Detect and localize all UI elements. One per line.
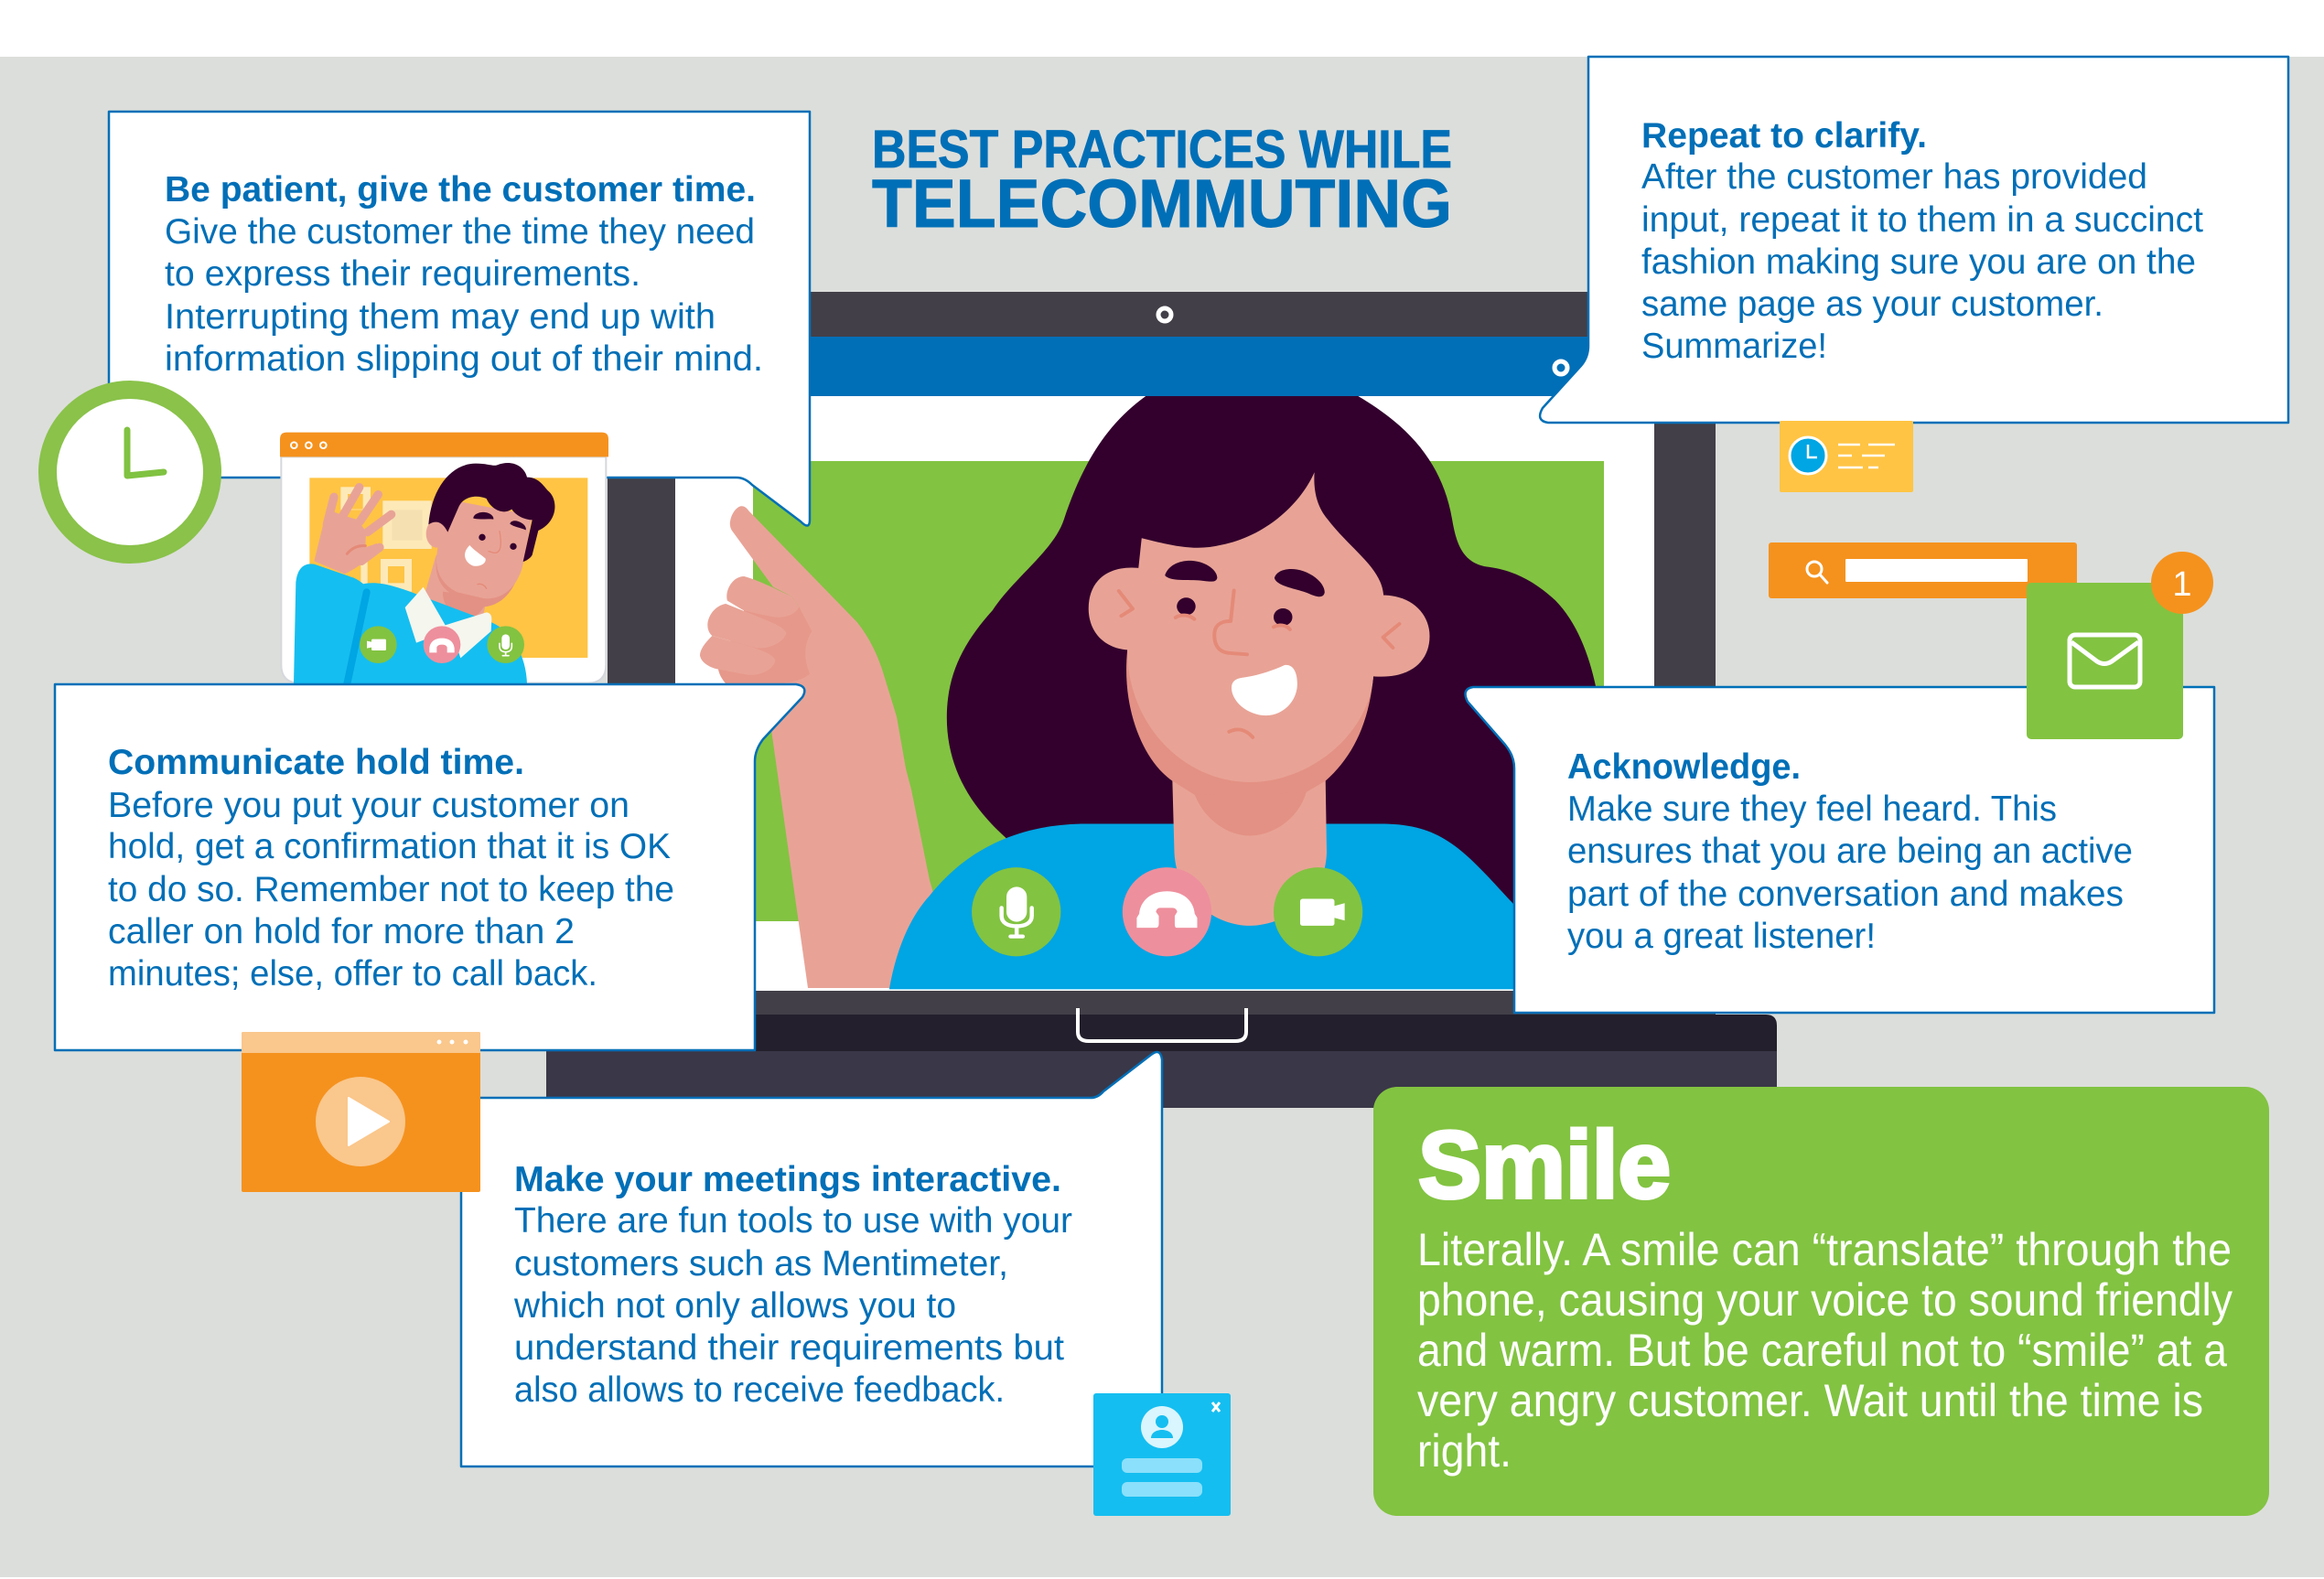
text block: communicate hold time: minutes; else, offer to call back. bbox=[108, 954, 597, 994]
icon: hang up button bbox=[1123, 867, 1211, 956]
heading: acknowledge: Acknowledge. bbox=[1567, 747, 1801, 787]
icon: mail card with notification bbox=[2027, 552, 2213, 739]
title bbox=[872, 120, 1452, 242]
icon: video camera button bbox=[1274, 867, 1362, 956]
woman's head and shoulders bbox=[889, 396, 1609, 989]
text block: repeat to clarify: input, repeat it to them in a succinct bbox=[1641, 200, 2203, 240]
text block: communicate hold time: Before you put your customer on bbox=[108, 786, 629, 825]
heading: repeat to clarify: Repeat to clarify. bbox=[1641, 116, 1927, 156]
text block: meetings interactive: which not only allows you to bbox=[513, 1286, 956, 1326]
icon: mail card with notification: 1 bbox=[2172, 565, 2192, 604]
text block: smile: Literally. A smile can “translate” through the bbox=[1417, 1224, 2232, 1275]
text block: smile: very angry customer. Wait until the time is bbox=[1417, 1375, 2203, 1426]
title: BEST PRACTICES WHILE bbox=[872, 120, 1452, 179]
text block: acknowledge: part of the conversation and makes bbox=[1567, 875, 2124, 914]
text block: communicate hold time: caller on hold for more than 2 bbox=[108, 912, 575, 951]
text block: communicate hold time: to do so. Remember not to keep the bbox=[108, 870, 674, 909]
text block: be patient: information slipping out of their mind. bbox=[165, 339, 763, 379]
text block: repeat to clarify bbox=[1641, 157, 2203, 366]
text block: acknowledge: Make sure they feel heard. This bbox=[1567, 790, 2057, 829]
text block: repeat to clarify: Summarize! bbox=[1641, 327, 1827, 366]
icon: small video button bbox=[360, 626, 397, 663]
text block: acknowledge bbox=[1567, 790, 2133, 956]
icon: schedule card bbox=[1780, 421, 1913, 492]
text block: meetings interactive: There are fun tools to use with your bbox=[514, 1201, 1072, 1241]
speech bubble: communicate hold time bbox=[55, 684, 804, 1050]
icon: profile card bbox=[1093, 1393, 1231, 1516]
text block: repeat to clarify: same page as your customer. bbox=[1641, 285, 2103, 324]
text block: be patient: Interrupting them may end up with bbox=[165, 297, 715, 337]
panel: smile bbox=[1373, 1087, 2269, 1516]
text block: communicate hold time: hold, get a confirmation that it is OK bbox=[108, 827, 671, 866]
speech bubble: be patient bbox=[109, 112, 810, 526]
text block: meetings interactive: also allows to receive feedback. bbox=[514, 1370, 1005, 1410]
icon: video player window bbox=[242, 1032, 480, 1192]
icon: small hang up button bbox=[424, 626, 460, 663]
icon: small microphone button bbox=[487, 626, 524, 663]
text block: meetings interactive: understand their requirements but bbox=[514, 1328, 1064, 1368]
heading: meetings interactive: Make your meetings interactive. bbox=[514, 1160, 1061, 1199]
speech bubble: repeat to clarify bbox=[1540, 57, 2288, 423]
text block: repeat to clarify: fashion making sure you are on the bbox=[1641, 242, 2196, 282]
text block: be patient bbox=[165, 212, 763, 379]
heading: communicate hold time: Communicate hold time. bbox=[108, 743, 524, 782]
speech bubble: meetings interactive bbox=[461, 1052, 1162, 1466]
text block: smile: and warm. But be careful not to “smile” at a bbox=[1417, 1325, 2227, 1376]
video call window with man bbox=[280, 433, 608, 684]
text block: repeat to clarify: After the customer has provided bbox=[1641, 157, 2147, 197]
text block: smile bbox=[1417, 1224, 2233, 1477]
icon: microphone button bbox=[972, 867, 1060, 956]
text block: communicate hold time bbox=[108, 786, 674, 994]
speech bubble: acknowledge bbox=[1466, 687, 2214, 1013]
text block: meetings interactive: customers such as Mentimeter, bbox=[514, 1244, 1008, 1284]
text block: meetings interactive bbox=[513, 1201, 1072, 1410]
heading: smile: Smile bbox=[1418, 1112, 1671, 1219]
icon: clock bbox=[48, 390, 212, 554]
text block: acknowledge: you a great listener! bbox=[1567, 917, 1876, 956]
text block: acknowledge: ensures that you are being an active bbox=[1567, 832, 2133, 871]
woman on video call bbox=[700, 396, 1609, 989]
woman's pointing arm bbox=[700, 506, 961, 988]
icon: search bar bbox=[1769, 542, 2077, 598]
text block: be patient: Give the customer the time they need bbox=[165, 212, 755, 252]
text block: be patient: to express their requirements. bbox=[165, 254, 640, 294]
text block: smile: right. bbox=[1417, 1425, 1512, 1477]
text block: smile: phone, causing your voice to sound friendly bbox=[1417, 1274, 2233, 1326]
heading: be patient: Be patient, give the customer time. bbox=[165, 170, 756, 209]
title: TELECOMMUTING bbox=[872, 166, 1452, 242]
laptop monitor bbox=[546, 292, 1777, 1108]
